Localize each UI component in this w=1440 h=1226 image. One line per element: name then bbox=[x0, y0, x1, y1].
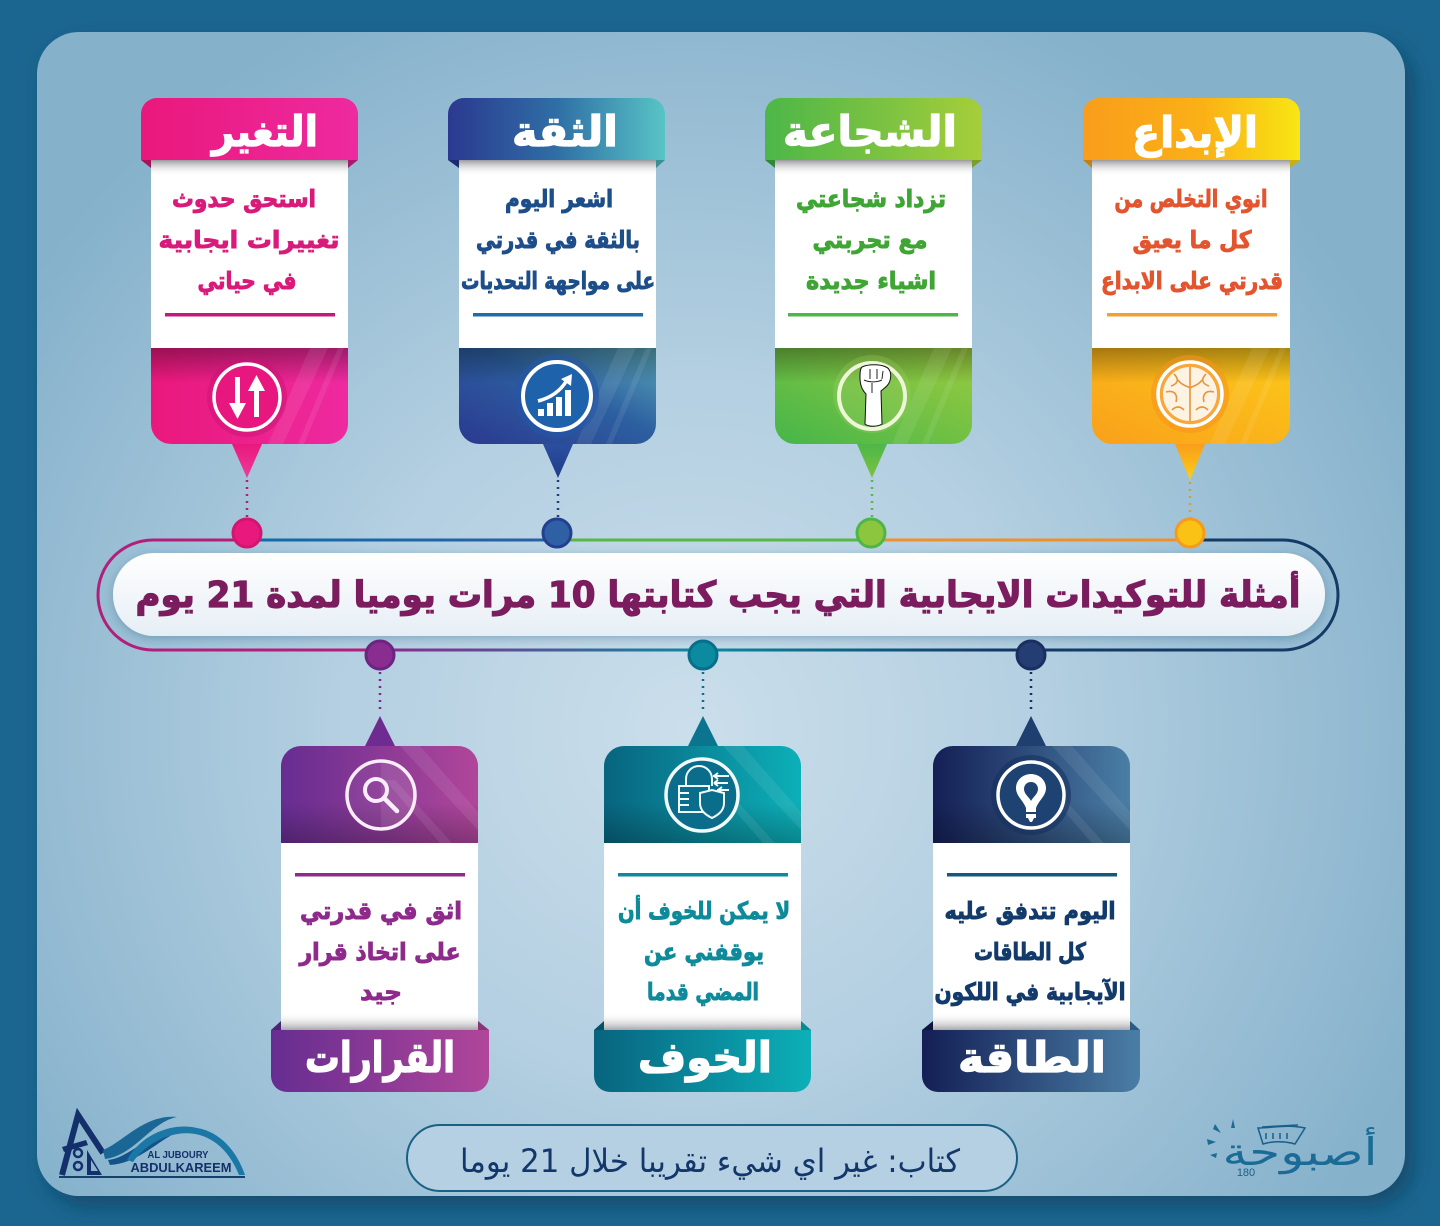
divider bbox=[165, 313, 335, 316]
top shading bbox=[604, 770, 801, 843]
white text area bbox=[1092, 160, 1290, 348]
timeline: purple to teal segment bbox=[380, 648, 703, 652]
card: energy bbox=[922, 641, 1140, 1092]
white text area bbox=[151, 160, 348, 348]
half highlight bbox=[381, 761, 415, 829]
card: courage bbox=[765, 98, 982, 547]
line 2: بالثقة في قدرتي bbox=[476, 226, 640, 254]
card body bottom bbox=[775, 348, 972, 444]
card top bbox=[604, 746, 801, 843]
header ribbon bbox=[271, 1030, 489, 1092]
header ribbon bbox=[448, 98, 665, 160]
fold left bbox=[1083, 160, 1092, 168]
divider bbox=[295, 873, 465, 876]
fold right bbox=[801, 1021, 811, 1030]
down arrow bbox=[229, 377, 246, 419]
line 3: المضي قدما bbox=[647, 978, 759, 1006]
card: fear bbox=[594, 641, 811, 1092]
heading: الإبداع bbox=[1132, 108, 1258, 157]
ring bbox=[839, 363, 905, 429]
line 2: على اتخاذ قرار bbox=[299, 938, 460, 966]
white area shadow bbox=[151, 160, 348, 176]
header ribbon bbox=[1083, 98, 1300, 160]
connector dots bbox=[1189, 482, 1191, 518]
number: 180 bbox=[1237, 1167, 1255, 1179]
handle bbox=[384, 798, 397, 811]
light streaks bbox=[385, 746, 478, 843]
up arrow bbox=[248, 375, 265, 417]
timeline: green segment bbox=[557, 538, 871, 542]
heading: الخوف bbox=[638, 1033, 772, 1083]
fold left bbox=[271, 1021, 281, 1030]
letter A bbox=[62, 1115, 103, 1175]
ring bbox=[666, 759, 738, 831]
halo bbox=[1151, 355, 1229, 433]
halo bbox=[207, 357, 287, 437]
source text: كتاب: غير اي شيء تقريبا خلال 21 يوما bbox=[460, 1142, 961, 1180]
building wing bbox=[87, 1150, 102, 1175]
pointer bbox=[857, 444, 887, 478]
timeline: orange segment bbox=[871, 538, 1190, 542]
body shading bbox=[1092, 348, 1290, 418]
heading: الثقة bbox=[512, 107, 618, 156]
icon: light bulb bbox=[991, 755, 1071, 835]
line 1: لا يمكن للخوف أن bbox=[618, 895, 790, 925]
line 3: اشياء جديدة bbox=[806, 267, 936, 295]
icon: growth chart bbox=[515, 354, 599, 438]
body shading bbox=[775, 348, 972, 418]
fold right bbox=[478, 1021, 489, 1030]
light streaks bbox=[1210, 348, 1286, 444]
header ribbon bbox=[765, 98, 982, 160]
heading: الشجاعة bbox=[783, 107, 957, 156]
node bbox=[543, 519, 571, 547]
logo line 2: ABDULKAREEM bbox=[130, 1160, 232, 1175]
logo line 1: AL JUBOURY bbox=[148, 1150, 209, 1161]
timeline connector pill bbox=[98, 540, 1338, 650]
line 1: اليوم تتدفق عليه bbox=[944, 897, 1116, 925]
halo bbox=[515, 354, 599, 438]
icon: magnifier bbox=[347, 761, 415, 829]
divider bbox=[1107, 313, 1277, 316]
line 2: كل الطاقات bbox=[974, 938, 1086, 966]
white text area bbox=[604, 843, 801, 1030]
halo bbox=[991, 755, 1071, 835]
body text bbox=[158, 185, 340, 295]
icon: lock and shield bbox=[666, 759, 738, 831]
fold left bbox=[141, 160, 151, 168]
card: decisions bbox=[271, 641, 489, 1092]
fold right bbox=[656, 160, 665, 168]
bulb base bbox=[1026, 814, 1036, 822]
node bbox=[857, 519, 885, 547]
line 3: على مواجهة التحديات bbox=[461, 267, 655, 295]
body shading bbox=[459, 348, 656, 418]
logo: Al Jubouri Abdulkareem bbox=[59, 1115, 245, 1178]
line 3: الآيجابية في اللكون bbox=[934, 978, 1126, 1006]
connector dots bbox=[1030, 672, 1032, 712]
light streaks bbox=[576, 348, 652, 444]
line 3: في حياتي bbox=[198, 267, 296, 295]
body text bbox=[796, 185, 946, 295]
sun rays bbox=[1207, 1119, 1235, 1158]
body text bbox=[1101, 185, 1283, 295]
line 1: اشعر اليوم bbox=[505, 185, 613, 213]
white area shadow bbox=[1092, 160, 1290, 176]
connector dots bbox=[246, 480, 248, 518]
header ribbon bbox=[594, 1030, 811, 1092]
line 3: قدرتي على الابداع bbox=[1101, 267, 1283, 295]
timeline: teal to navy segment bbox=[703, 648, 1031, 652]
timeline: navy segment bbox=[1031, 540, 1338, 650]
second swoosh bbox=[108, 1127, 194, 1165]
connector dots bbox=[702, 672, 704, 714]
pointer bbox=[543, 444, 573, 478]
divider bbox=[788, 313, 958, 316]
bulb bbox=[1016, 774, 1046, 812]
wordmark: أصبوحة bbox=[1222, 1127, 1378, 1175]
fist bbox=[860, 365, 891, 426]
light streaks bbox=[268, 348, 344, 444]
book lines bbox=[1262, 1125, 1298, 1139]
line 1: استحق حدوث bbox=[172, 185, 316, 213]
card body bottom bbox=[459, 348, 656, 444]
fold left bbox=[594, 1021, 604, 1030]
card: change bbox=[141, 98, 358, 547]
line 2: تغييرات ايجابية bbox=[158, 226, 340, 254]
card body bottom bbox=[151, 348, 348, 444]
ring bbox=[347, 761, 415, 829]
body shading bbox=[151, 348, 348, 418]
bars bbox=[538, 390, 571, 416]
building window lower bbox=[74, 1162, 82, 1170]
line 1: اثق في قدرتي bbox=[300, 897, 462, 925]
node bbox=[233, 519, 261, 547]
timeline: magenta segment bbox=[98, 540, 380, 650]
fold left bbox=[922, 1021, 933, 1030]
line 2: كل ما يعيق bbox=[1132, 226, 1252, 254]
lock body bbox=[679, 786, 709, 812]
card top bbox=[933, 746, 1130, 843]
node bbox=[366, 641, 394, 669]
line 3: جيد bbox=[360, 978, 402, 1006]
white area shadow bbox=[933, 1012, 1130, 1030]
white area shadow bbox=[775, 160, 972, 176]
connector dots bbox=[557, 480, 559, 518]
top shading bbox=[281, 770, 478, 843]
connector dots bbox=[379, 672, 381, 714]
ring bbox=[998, 762, 1064, 828]
body text bbox=[461, 185, 655, 295]
ring bbox=[1158, 362, 1222, 426]
line 1: تزداد شجاعتي bbox=[796, 185, 946, 213]
line 2: يوقفني عن bbox=[644, 938, 764, 966]
brain folds bbox=[1166, 367, 1214, 421]
header ribbon bbox=[141, 98, 358, 160]
halo bbox=[833, 355, 911, 433]
pointer bbox=[1175, 444, 1205, 480]
line 1: انوي التخلص من bbox=[1114, 185, 1268, 213]
body text bbox=[618, 895, 790, 1006]
building windows bbox=[74, 1149, 82, 1157]
pointer bbox=[688, 716, 718, 746]
pill outline bbox=[407, 1125, 1017, 1191]
light streaks bbox=[708, 746, 801, 843]
arrow head bbox=[561, 374, 572, 386]
heading: الطاقة bbox=[958, 1033, 1106, 1082]
fold left bbox=[448, 160, 459, 168]
fold right bbox=[972, 160, 982, 168]
timeline: blue segment bbox=[247, 538, 557, 542]
node bbox=[1176, 519, 1204, 547]
divider bbox=[618, 873, 788, 876]
logo: Osbouha 180 bbox=[1207, 1119, 1378, 1179]
line 2: مع تجربتي bbox=[812, 226, 928, 254]
top shading bbox=[933, 770, 1130, 843]
central title pill bbox=[113, 553, 1325, 636]
white area shadow bbox=[281, 1012, 478, 1030]
node bbox=[1017, 641, 1045, 669]
white area shadow bbox=[604, 1012, 801, 1030]
base line bbox=[59, 1176, 245, 1178]
shield bbox=[700, 790, 724, 818]
heading: التغير bbox=[210, 107, 318, 157]
card top bbox=[281, 746, 478, 843]
white text area bbox=[459, 160, 656, 348]
icon: brain bbox=[1151, 355, 1229, 433]
white text area bbox=[281, 843, 478, 1030]
book bbox=[1258, 1126, 1305, 1144]
ring bbox=[214, 364, 280, 430]
header ribbon bbox=[922, 1030, 1140, 1092]
light streaks bbox=[1037, 746, 1130, 843]
card: creativity bbox=[1083, 98, 1300, 547]
white text area bbox=[933, 843, 1130, 1030]
icon: fist bbox=[833, 355, 911, 433]
fold left bbox=[765, 160, 775, 168]
icon: up and down arrows bbox=[207, 357, 287, 437]
body text bbox=[934, 897, 1126, 1006]
title text: أمثلة للتوكيدات الايجابية التي يجب كتابتها 10 مرات يوميا لمدة 21 يوم bbox=[136, 571, 1301, 616]
pointer bbox=[365, 716, 395, 746]
pointer bbox=[1016, 716, 1046, 746]
fingers bbox=[864, 369, 883, 393]
fold right bbox=[348, 160, 358, 168]
swoosh bbox=[103, 1117, 177, 1159]
pill background bbox=[113, 553, 1325, 636]
card body bottom bbox=[1092, 348, 1290, 444]
light streaks bbox=[892, 348, 968, 444]
arrows bbox=[713, 773, 729, 793]
body text bbox=[299, 897, 462, 1006]
fold right bbox=[1130, 1021, 1140, 1030]
lock shackle bbox=[686, 766, 712, 786]
card: confidence bbox=[448, 98, 665, 547]
arrow bbox=[538, 380, 567, 401]
pointer bbox=[232, 444, 262, 478]
brain fill bbox=[1163, 367, 1217, 421]
building crossbar bbox=[62, 1140, 88, 1152]
arch bbox=[127, 1126, 245, 1175]
heading: القرارات bbox=[305, 1033, 455, 1083]
divider bbox=[473, 313, 643, 316]
node bbox=[689, 641, 717, 669]
white area shadow bbox=[459, 160, 656, 176]
divider bbox=[947, 873, 1117, 876]
fold right bbox=[1290, 160, 1300, 168]
source pill bbox=[407, 1125, 1017, 1191]
connector dots bbox=[871, 480, 873, 518]
ring bbox=[523, 362, 591, 430]
white text area bbox=[775, 160, 972, 348]
lens bbox=[365, 779, 387, 801]
